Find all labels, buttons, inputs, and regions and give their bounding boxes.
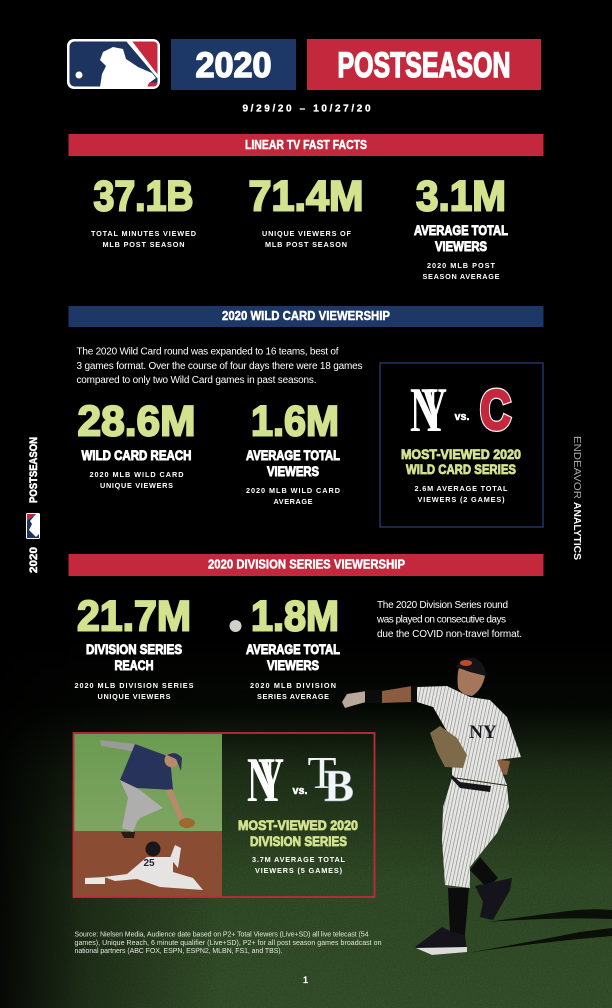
panel: most-viewed division series: 3.7M AVERAGE TOTAL: [252, 855, 346, 864]
stat: 1.8M average total viewers: 2020 MLB DIVISION: [250, 681, 336, 690]
stat: 37.1B: MLB POST SEASON: [102, 240, 184, 249]
wild card description: [76, 346, 362, 386]
stat: 1.6M average total viewers: VIEWERS: [267, 464, 319, 479]
stat: 71.4M: [248, 172, 364, 249]
stat: 1.8M average total viewers: SERIES AVERAGE: [257, 692, 329, 701]
icon: Yankees vs Cleveland: vs.: [454, 411, 470, 423]
postseason banner: POSTSEASON: [338, 46, 510, 85]
year banner: 2020: [196, 46, 272, 85]
panel: most-viewed division series: [74, 733, 374, 897]
stat: 37.1B: 37.1B: [94, 172, 194, 220]
section bar: wild card viewership: [68, 306, 544, 327]
stat: 1.6M average total viewers: [246, 398, 340, 506]
stat: 1.8M average total viewers: VIEWERS: [267, 658, 319, 673]
wild card description: The 2020 Wild Card round was expanded to 16 teams, best of: [76, 346, 339, 358]
stat: 3.1M: SEASON AVERAGE: [422, 272, 500, 281]
icon: Yankees vs Rays: T: [308, 747, 336, 798]
source note: national partners (ABC FOX, ESPN, ESPN2, MLBN, FS1, and TBS).: [74, 948, 283, 955]
stat: 28.6M wild card reach: 28.6M: [78, 398, 196, 446]
icon: Yankees vs Rays: Y: [258, 744, 284, 815]
year banner: [171, 39, 296, 90]
stat: 1.8M average total viewers: AVERAGE TOTAL: [246, 642, 340, 657]
side label: 2020 postseason: 2020: [28, 547, 40, 573]
player photo: outfielder throwing: [342, 658, 521, 955]
side label: 2020 postseason: [26, 437, 40, 573]
stat: 28.6M wild card reach: 2020 MLB WILD CARD: [90, 470, 184, 479]
stat: 71.4M: UNIQUE VIEWERS OF: [262, 229, 352, 238]
stat: 1.6M average total viewers: AVERAGE TOTAL: [246, 448, 340, 463]
panel: most-viewed wild card series: VIEWERS (2 GAMES): [418, 495, 505, 504]
player photo: outfielder throwing: NY: [469, 722, 497, 743]
stat: 37.1B: TOTAL MINUTES VIEWED: [91, 229, 196, 238]
source note: [74, 932, 382, 955]
section bar: division series viewership: [68, 554, 544, 576]
icon: Yankees vs Cleveland: C: [480, 378, 511, 441]
date range: 9/29/20 – 10/27/20: [242, 104, 371, 114]
icon: Yankees vs Cleveland: N: [410, 374, 438, 445]
stat: 1.8M average total viewers: 1.8M: [251, 592, 339, 640]
postseason banner: [307, 39, 541, 90]
side label: 2020 postseason: POSTSEASON: [28, 437, 40, 503]
side label: endeavor analytics: ENDEAVOR: [571, 436, 583, 499]
stat: 1.6M average total viewers: 1.6M: [251, 398, 339, 446]
section bar: linear tv fast facts: LINEAR TV FAST FACTS: [245, 138, 367, 152]
panel: most-viewed division series: MOST-VIEWED 2020: [238, 818, 358, 833]
icon: Yankees vs Rays: N: [247, 744, 275, 815]
stat: 71.4M: MLB POST SEASON: [265, 240, 347, 249]
wild card description: 3 games format. Over the course of four days there were 18 games: [76, 361, 362, 372]
panel: most-viewed division series: VIEWERS (5 GAMES): [255, 866, 343, 875]
stat: 1.8M average total viewers: [246, 592, 340, 701]
source note: Source: Nielsen Media, Audience date based on P2+ Total Viewers (Live+SD) all live telecast (54: [74, 932, 369, 938]
icon: Yankees vs Cleveland: C: [480, 378, 511, 441]
stat: 3.1M: [414, 172, 508, 281]
stat: 71.4M: 71.4M: [248, 172, 364, 220]
wild card description: compared to only two Wild Card games in past seasons.: [76, 375, 316, 386]
stat: 21.7M division series reach: DIVISION SERIES: [86, 642, 182, 657]
page number: 1: [303, 975, 308, 985]
stat: 28.6M wild card reach: WILD CARD REACH: [82, 448, 192, 463]
stat: 1.6M average total viewers: AVERAGE: [274, 497, 313, 506]
panel: most-viewed wild card series: [380, 363, 543, 527]
stat: 21.7M division series reach: REACH: [114, 658, 154, 673]
division series description: was played on consecutive days: [376, 614, 506, 626]
panel: most-viewed division series: DIVISION SERIES: [250, 834, 347, 849]
side label: endeavor analytics: [571, 436, 583, 560]
panel: most-viewed wild card series: MOST-VIEWED 2020: [401, 447, 521, 462]
stat: 3.1M: AVERAGE TOTAL: [414, 223, 508, 238]
icon: Yankees vs Rays: [247, 744, 354, 815]
icon: MLB logo: [67, 39, 160, 89]
stat: 21.7M division series reach: [74, 592, 194, 701]
icon: baseball: [230, 620, 242, 632]
section bar: wild card viewership: 2020 WILD CARD VIEWERSHIP: [222, 309, 390, 323]
stat: 28.6M wild card reach: UNIQUE VIEWERS: [100, 481, 173, 490]
stat: 37.1B: [91, 172, 196, 249]
stat: 3.1M: VIEWERS: [435, 239, 487, 254]
division series description: [376, 600, 522, 640]
icon: small MLB logo: [26, 513, 40, 539]
photo: second-base slide: [74, 734, 222, 897]
division series description: The 2020 Division Series round: [377, 600, 508, 611]
player shadows on grass: [467, 909, 612, 953]
panel: most-viewed wild card series: WILD CARD SERIES: [406, 462, 516, 477]
stat: 21.7M division series reach: 2020 MLB DIVISION SERIES: [74, 681, 194, 690]
section bar: linear tv fast facts: [68, 134, 544, 156]
stat: 3.1M: 2020 MLB POST: [427, 261, 496, 270]
stat: 28.6M wild card reach: [78, 398, 196, 490]
icon: Yankees vs Cleveland: [410, 374, 511, 445]
stat: 21.7M division series reach: UNIQUE VIEWERS: [98, 692, 171, 701]
panel: most-viewed wild card series: 2.6M AVERAGE TOTAL: [414, 484, 508, 493]
source note: games), Unique Reach, 6 minute qualifier (Live+SD), P2+ for all post season games broadcast on: [74, 940, 382, 947]
stat: 3.1M: 3.1M: [416, 172, 506, 220]
side label: endeavor analytics: ANALYTICS: [571, 502, 583, 560]
section bar: division series viewership: 2020 DIVISION SERIES VIEWERSHIP: [208, 558, 405, 572]
division series description: due the COVID non-travel format.: [377, 629, 522, 640]
icon: Yankees vs Cleveland: Y: [421, 374, 447, 445]
icon: Yankees vs Rays: vs.: [292, 785, 308, 797]
stat: 1.6M average total viewers: 2020 MLB WILD CARD: [246, 486, 340, 495]
stat: 21.7M division series reach: 21.7M: [77, 592, 191, 640]
photo: second-base slide: 25: [143, 858, 155, 869]
icon: Yankees vs Rays: B: [324, 760, 354, 811]
